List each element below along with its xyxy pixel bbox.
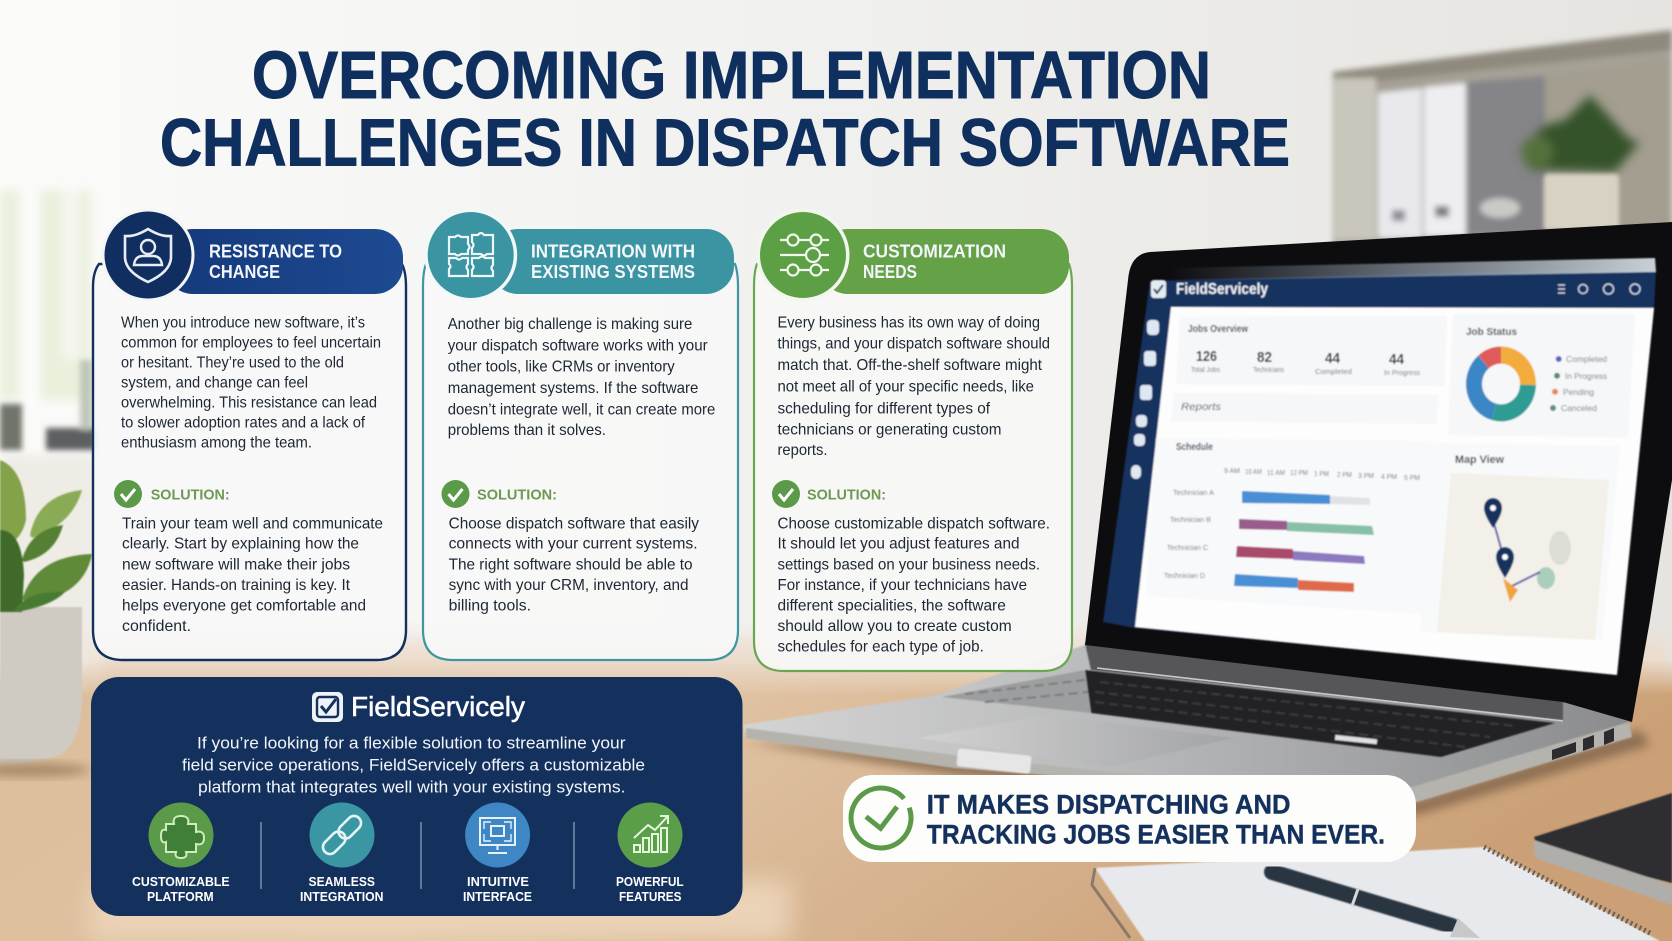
card: schedule chart: Technician C <box>1167 545 1208 552</box>
card: jobs overview: 44 <box>1389 351 1405 368</box>
solution text: connects with your current systems. <box>449 536 698 553</box>
laptop base <box>743 643 1632 790</box>
feature: intuitive interface: INTUITIVE <box>467 874 529 889</box>
card outline <box>93 264 406 660</box>
solution text: It should let you adjust features and <box>778 536 1020 553</box>
description: field service operations, FieldServicely offers a customizable <box>182 756 645 775</box>
problem text: things, and your dispatch software should <box>778 335 1050 352</box>
screen content area <box>1135 307 1654 675</box>
header bar <box>490 229 734 294</box>
card: schedule chart: 3 PM <box>1358 473 1374 480</box>
shelf <box>1333 30 1672 245</box>
wall-to-desk haze <box>90 640 1672 700</box>
solution text: Train your team well and communicate <box>122 515 383 532</box>
description: If you’re looking for a flexible solution to streamline your <box>197 734 626 753</box>
icon: check ring <box>851 788 911 848</box>
solution text: different specialities, the software <box>778 598 1006 615</box>
sidebar icons <box>1131 320 1159 479</box>
solution text: settings based on your business needs. <box>778 556 1040 573</box>
card: jobs overview: Jobs Overview <box>1188 324 1248 335</box>
heading: CHANGE <box>209 261 280 282</box>
card: map view <box>1420 443 1620 640</box>
card: schedule chart <box>1146 438 1432 614</box>
problem text: other tools, like CRMs or inventory <box>448 359 675 376</box>
card: jobs overview: 126 <box>1196 348 1217 365</box>
solution label <box>114 480 230 508</box>
card: schedule chart: 11 AM <box>1267 470 1285 477</box>
phone on desk <box>1534 793 1672 905</box>
feature: seamless integration <box>300 802 384 904</box>
problem text: common for employees to feel uncertain <box>121 335 381 352</box>
card: job status donut <box>1448 314 1635 437</box>
feature: powerful features: FEATURES <box>619 889 682 904</box>
card: job status donut: Pending <box>1563 387 1594 397</box>
heading: NEEDS <box>863 261 917 282</box>
solution text: new software will make their jobs <box>122 556 350 573</box>
screen <box>1103 258 1656 675</box>
title: OVERCOMING IMPLEMENTATION <box>252 38 1211 113</box>
solution label <box>772 480 886 508</box>
panel: resistance to change <box>93 208 406 660</box>
card: jobs overview: In Progress <box>1384 370 1420 377</box>
icon: shield person <box>102 208 194 302</box>
card: schedule chart: 4 PM <box>1381 474 1397 481</box>
solution text: clearly. Start by explaining how the <box>122 536 359 553</box>
solution text: The right software should be able to <box>449 556 693 573</box>
problem text <box>121 315 381 452</box>
card: jobs overview <box>1176 316 1447 386</box>
solution text <box>778 515 1050 656</box>
left plant leaves <box>0 460 92 612</box>
card: job status donut: In Progress <box>1565 371 1607 381</box>
solution text <box>122 515 383 635</box>
feature: intuitive interface: INTERFACE <box>463 889 532 904</box>
problem text: not meet all of your specific needs, like <box>778 379 1034 396</box>
keyboard <box>942 670 1555 757</box>
side ports <box>1552 728 1614 760</box>
description <box>182 734 645 796</box>
solution text: should allow you to create custom <box>778 618 1012 635</box>
solution text: schedules for each type of job. <box>778 639 984 656</box>
problem text: doesn’t integrate well, it can create more <box>448 401 715 418</box>
card: schedule chart: Schedule <box>1176 442 1213 453</box>
card: jobs overview: 44 <box>1325 350 1341 367</box>
card: schedule chart: Technician A <box>1173 490 1214 497</box>
panel: customization needs <box>754 208 1072 671</box>
heading: EXISTING SYSTEMS <box>531 261 695 282</box>
card outline <box>754 264 1072 671</box>
laptop lid bezel <box>1085 222 1672 722</box>
card: schedule chart: 5 PM <box>1404 475 1420 482</box>
problem text: match that. Off-the-shelf software might <box>778 357 1043 374</box>
card: schedule chart: Technician B <box>1170 517 1211 524</box>
heading <box>863 240 1006 282</box>
trackpad <box>918 715 1233 767</box>
card: reports strip <box>1171 393 1439 424</box>
problem text: scheduling for different types of <box>778 400 991 417</box>
app logo and title <box>1151 280 1268 298</box>
solution label: SOLUTION: <box>151 486 230 504</box>
solution text <box>449 515 699 615</box>
feature: seamless integration: SEAMLESS <box>308 874 375 889</box>
card: jobs overview: Completed <box>1315 369 1352 376</box>
problem text: management systems. If the software <box>448 380 698 397</box>
title <box>160 38 1290 180</box>
solution text: helps everyone get comfortable and <box>122 598 366 615</box>
feature: intuitive interface <box>463 802 532 904</box>
card: jobs overview: Total Jobs <box>1191 367 1220 374</box>
problem text: technicians or generating custom <box>778 421 1002 438</box>
problem text: enthusiasm among the team. <box>121 435 312 452</box>
panel: FieldServicely promo <box>91 677 742 916</box>
feature: customizable platform: PLATFORM <box>147 889 214 904</box>
card: schedule chart: 2 PM <box>1337 472 1352 479</box>
solution text: confident. <box>122 618 191 635</box>
card: job status donut: Job Status <box>1466 326 1517 338</box>
problem text: reports. <box>778 442 828 459</box>
feature: powerful features: POWERFUL <box>616 874 684 889</box>
problem text: or hesitant. They’re used to the old <box>121 355 344 372</box>
header icons <box>1558 284 1640 294</box>
laptop photo <box>743 222 1672 815</box>
desk surface <box>0 660 1672 941</box>
heading <box>531 240 695 282</box>
callout text <box>927 789 1385 849</box>
description: platform that integrates well with your existing systems. <box>198 777 626 796</box>
problem text: Every business has its own way of doing <box>778 315 1040 332</box>
solution text: easier. Hands-on training is key. It <box>122 577 351 594</box>
laptop shadow <box>744 730 1650 815</box>
solution text: For instance, if your technicians have <box>778 577 1027 594</box>
app logo and title: FieldServicely <box>1176 281 1268 298</box>
problem text <box>448 316 715 439</box>
icon: sliders <box>756 208 850 302</box>
pen <box>1272 872 1452 926</box>
problem text: overwhelming. This resistance can lead <box>121 395 377 412</box>
heading: RESISTANCE TO <box>209 240 342 262</box>
solution text: billing tools. <box>449 598 531 615</box>
card: job status donut: Completed <box>1566 354 1607 364</box>
window and left wall <box>0 190 95 685</box>
callout text: IT MAKES DISPATCHING AND <box>927 789 1290 819</box>
card: map view: Map View <box>1455 454 1504 466</box>
problem text: Another big challenge is making sure <box>448 316 692 333</box>
callout text: TRACKING JOBS EASIER THAN EVER. <box>927 819 1385 849</box>
heading: INTEGRATION WITH <box>531 240 695 262</box>
card: jobs overview: Technicians <box>1253 367 1284 374</box>
header bar <box>165 229 403 294</box>
notebook and pen <box>1092 847 1660 941</box>
heading: CUSTOMIZATION <box>863 240 1006 262</box>
card: job status donut: Canceled <box>1561 403 1597 413</box>
left plant pot <box>0 607 82 765</box>
hinge strip <box>1085 643 1563 720</box>
card: schedule chart: 10 AM <box>1245 469 1262 476</box>
feature dividers <box>261 822 574 889</box>
header bar <box>820 229 1069 294</box>
feature: customizable platform <box>132 802 230 904</box>
solution text: sync with your CRM, inventory, and <box>449 577 689 594</box>
card: schedule chart: 1 PM <box>1314 471 1329 478</box>
problem text: When you introduce new software, it’s <box>121 315 365 332</box>
solution label: SOLUTION: <box>807 486 886 504</box>
problem text: system, and change can feel <box>121 375 308 392</box>
panel: integration with existing systems <box>423 208 738 660</box>
logo: FieldServicely <box>351 691 525 722</box>
solution text: Choose dispatch software that easily <box>449 515 699 532</box>
shelf plant <box>1520 95 1640 172</box>
problem text <box>778 315 1050 459</box>
callout: easier dispatching <box>843 775 1416 862</box>
title: CHALLENGES IN DISPATCH SOFTWARE <box>160 106 1290 180</box>
problem text: problems than it solves. <box>448 422 606 439</box>
feature: customizable platform: CUSTOMIZABLE <box>132 874 230 889</box>
solution label: SOLUTION: <box>477 486 557 504</box>
solution label <box>442 480 557 508</box>
card: jobs overview: 82 <box>1257 349 1272 366</box>
card: schedule chart: 9 AM <box>1224 468 1240 475</box>
problem text: to slower adoption rates and a lack of <box>121 415 366 432</box>
solution text: Choose customizable dispatch software. <box>778 515 1050 532</box>
feature: seamless integration: INTEGRATION <box>300 889 384 904</box>
card: schedule chart: Technician D <box>1164 573 1205 580</box>
heading <box>209 240 342 282</box>
card: reports strip: Reports <box>1181 402 1221 413</box>
card outline <box>423 264 738 660</box>
problem text: your dispatch software works with your <box>448 337 708 354</box>
card: schedule chart: 12 PM <box>1290 470 1308 477</box>
icon: puzzle pieces <box>424 208 517 302</box>
feature: powerful features <box>616 802 684 904</box>
